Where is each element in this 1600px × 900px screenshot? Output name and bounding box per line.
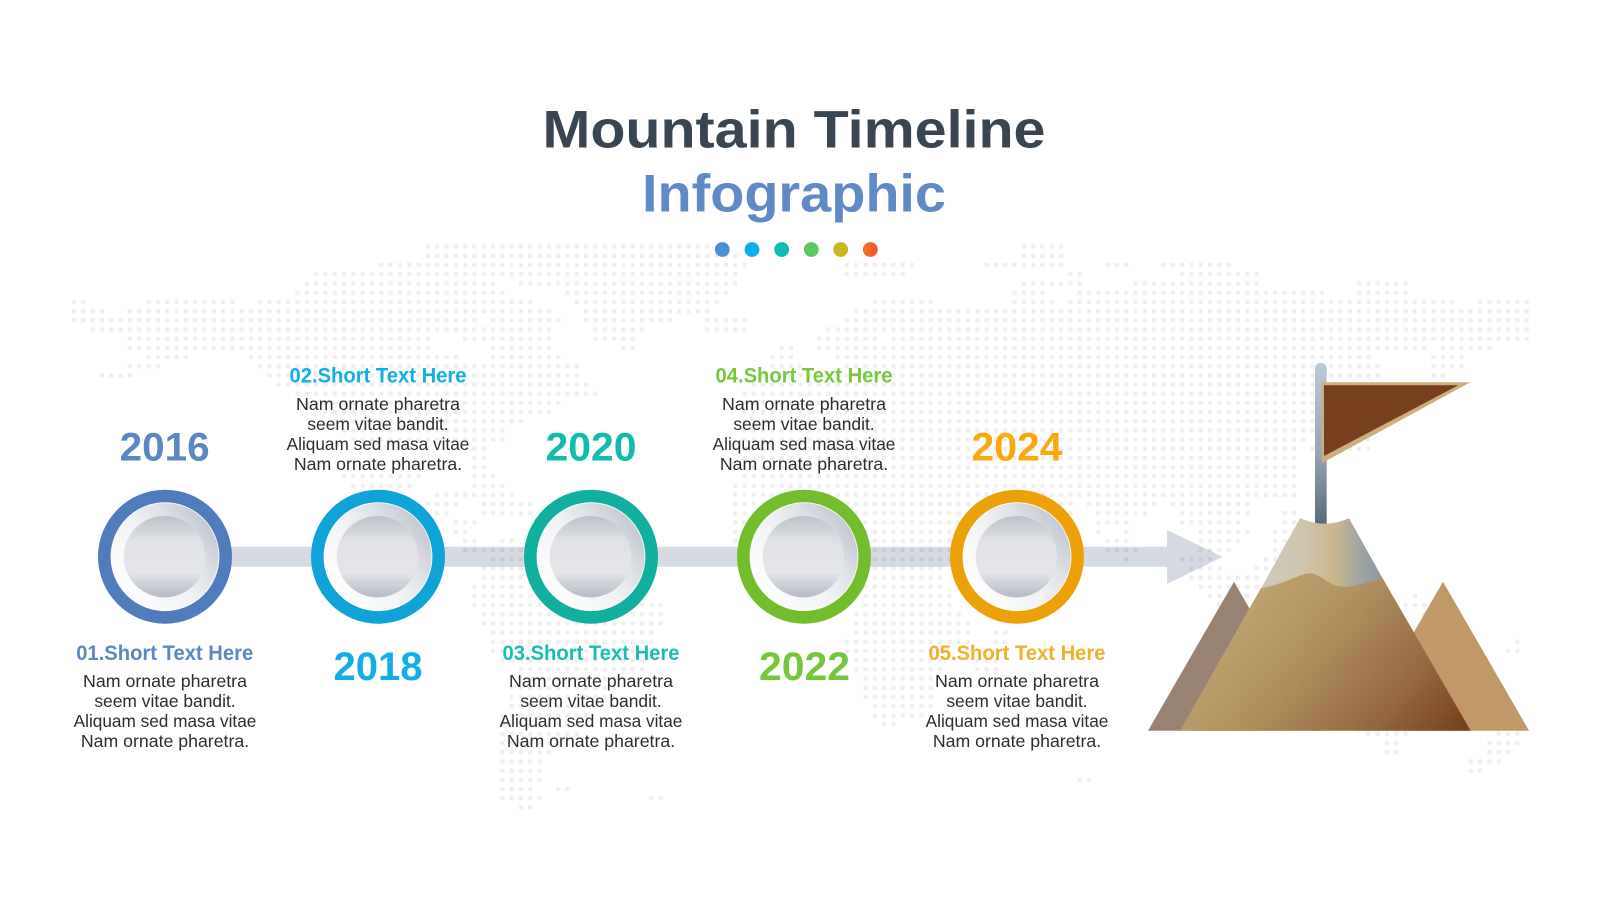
- milestone 2022: [713, 365, 895, 689]
- body 04: [713, 394, 895, 474]
- body 01: Nam ornate pharetra: [83, 671, 247, 691]
- body 01: Aliquam sed masa vitae: [74, 711, 256, 731]
- body 01: [74, 671, 256, 751]
- body 02: Nam ornate pharetra: [296, 394, 460, 414]
- body 03: [500, 671, 682, 751]
- node 4: [737, 490, 871, 624]
- body 03: seem vitae bandit.: [520, 691, 662, 711]
- body 05: [926, 671, 1108, 751]
- body 04: Nam ornate pharetra: [722, 394, 886, 414]
- body 02: Aliquam sed masa vitae: [287, 434, 469, 454]
- title: [542, 100, 1046, 224]
- year 2022: 2022: [759, 645, 850, 689]
- body 05: seem vitae bandit.: [946, 691, 1088, 711]
- year 2018: 2018: [334, 645, 422, 689]
- body 01: Nam ornate pharetra.: [81, 731, 249, 751]
- milestone 2016: [74, 426, 256, 751]
- main peak: [1180, 565, 1471, 731]
- title: Infographic: [642, 165, 946, 224]
- heading 04: 04.Short Text Here: [716, 365, 892, 388]
- body 02: [287, 394, 469, 474]
- year 2020: 2020: [546, 426, 636, 470]
- year 2016: 2016: [120, 426, 210, 470]
- node 5: [950, 490, 1084, 624]
- body 02: seem vitae bandit.: [307, 414, 449, 434]
- title: Mountain Timeline: [542, 100, 1046, 159]
- heading 03: 03.Short Text Here: [502, 642, 680, 665]
- node 3: [524, 490, 658, 624]
- heading 02: 02.Short Text Here: [290, 365, 466, 388]
- body 03: Aliquam sed masa vitae: [500, 711, 682, 731]
- body 05: Aliquam sed masa vitae: [926, 711, 1108, 731]
- right back peak: [1357, 582, 1529, 731]
- year 2024: 2024: [972, 426, 1063, 470]
- timeline arrow: [225, 530, 1223, 584]
- milestone 2018: [287, 365, 469, 689]
- snow cap: [1261, 518, 1382, 588]
- milestone 2024: [926, 426, 1108, 751]
- body 04: Aliquam sed masa vitae: [713, 434, 895, 454]
- node 2: [311, 490, 445, 624]
- dotted world map background: [72, 247, 1534, 807]
- body 01: seem vitae bandit.: [94, 691, 236, 711]
- node 1: [98, 490, 232, 624]
- flag pole: [1315, 363, 1327, 528]
- body 05: Nam ornate pharetra: [935, 671, 1099, 691]
- body 04: seem vitae bandit.: [733, 414, 875, 434]
- left back peak: [1148, 582, 1320, 731]
- icon: mountain with flag: [1148, 363, 1529, 731]
- flag: [1322, 382, 1470, 463]
- body 05: Nam ornate pharetra.: [933, 731, 1101, 751]
- heading 01: 01.Short Text Here: [76, 642, 253, 665]
- body 02: Nam ornate pharetra.: [294, 454, 462, 474]
- heading 05: 05.Short Text Here: [928, 642, 1106, 665]
- milestone 2020: [500, 426, 682, 751]
- body 03: Nam ornate pharetra.: [507, 731, 675, 751]
- colored title dots: [715, 242, 878, 257]
- body 04: Nam ornate pharetra.: [720, 454, 888, 474]
- body 03: Nam ornate pharetra: [509, 671, 673, 691]
